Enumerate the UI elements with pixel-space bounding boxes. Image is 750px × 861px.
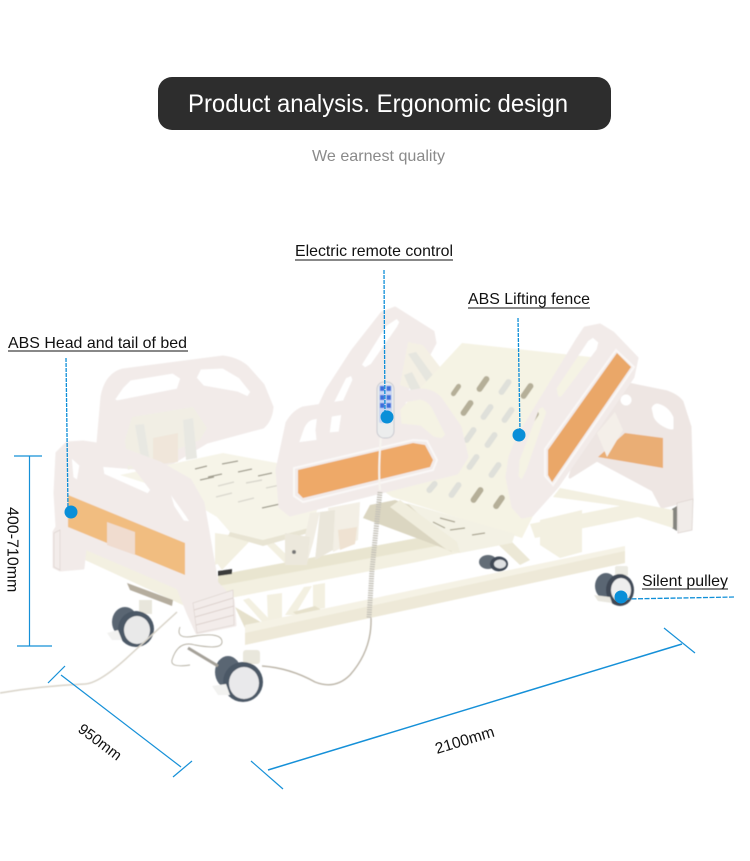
dimension: bed length: 2100mm bbox=[433, 724, 497, 758]
remote cord bbox=[262, 436, 381, 685]
dimension: bed length bbox=[251, 628, 695, 789]
head board bbox=[98, 357, 272, 470]
hospital bed illustration bbox=[0, 308, 693, 702]
front side rail bbox=[277, 390, 467, 515]
callout: ABS Lifting fence: ABS Lifting fence bbox=[468, 291, 590, 308]
far foot board bbox=[570, 384, 693, 533]
title banner bbox=[158, 77, 611, 130]
callout: Silent pulley: Silent pulley bbox=[642, 573, 728, 590]
caster: right front bbox=[594, 566, 634, 606]
callout: Silent pulley bbox=[614, 573, 735, 604]
knee deck panel bbox=[363, 500, 515, 553]
callout: Electric remote control: Electric remote control bbox=[295, 243, 453, 260]
subtitle: We earnest quality bbox=[312, 148, 445, 165]
power cord and coil bbox=[0, 612, 222, 693]
callout: ABS Head and tail of bed: ABS Head and tail of bed bbox=[8, 335, 187, 352]
dimension: bed width: 950mm bbox=[75, 721, 125, 764]
title banner: Product analysis. Ergonomic design bbox=[188, 90, 568, 118]
backrest deck with slots bbox=[365, 343, 600, 538]
callout: Electric remote control bbox=[295, 243, 453, 424]
near foot board bbox=[54, 442, 235, 633]
caster: front left rear wheel bbox=[107, 600, 154, 647]
icon: electric remote control handset bbox=[377, 382, 394, 438]
lifting fence (right side rail) bbox=[507, 325, 637, 517]
dimension: bed height: 400-710mm bbox=[4, 507, 20, 592]
caster far rear bbox=[479, 555, 508, 572]
callout: ABS Lifting fence bbox=[468, 291, 590, 442]
left deck panel bbox=[120, 453, 320, 546]
steel frame bbox=[85, 488, 673, 645]
caster: front centre bbox=[212, 650, 263, 702]
bed guard brackets bbox=[285, 502, 360, 565]
far side rail bbox=[317, 308, 440, 448]
callout: ABS Head and tail of bed bbox=[8, 335, 188, 518]
dimension: bed width bbox=[48, 666, 192, 777]
